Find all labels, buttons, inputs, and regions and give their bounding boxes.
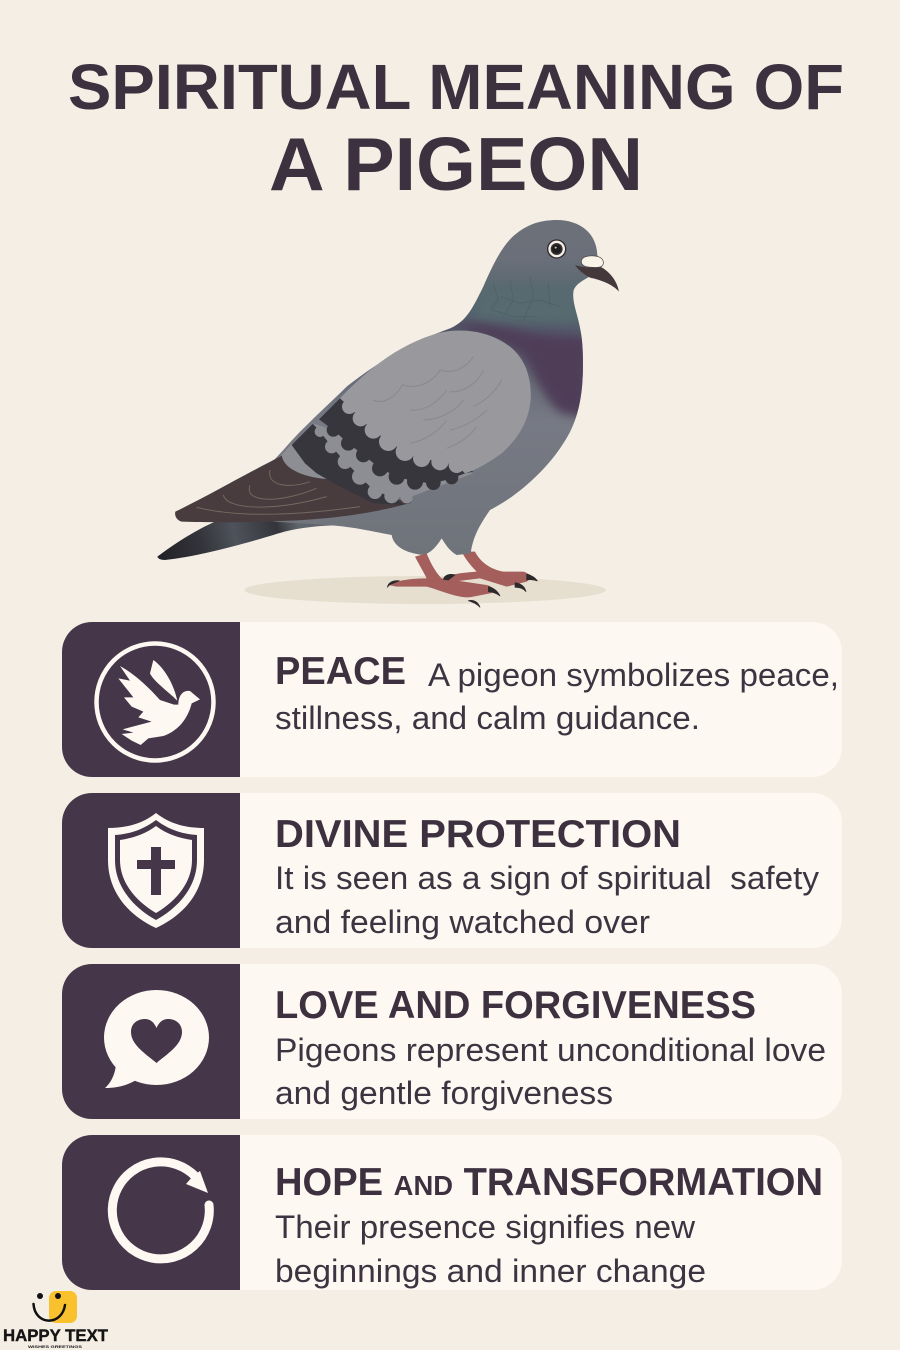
body text: A pigeon symbolizes peace, bbox=[428, 657, 839, 693]
front dark wing bar bbox=[319, 398, 473, 490]
icon: shield with cross bbox=[108, 813, 204, 928]
wing covert shield bbox=[340, 330, 531, 473]
body text: and gentle forgiveness bbox=[275, 1075, 613, 1111]
beak bbox=[575, 265, 619, 292]
body text: and feeling watched over bbox=[275, 904, 650, 940]
body text bbox=[275, 1209, 706, 1289]
panel: hope and transformation bbox=[62, 1135, 842, 1290]
title bbox=[68, 51, 844, 206]
eye bbox=[547, 239, 566, 259]
far leg bbox=[445, 552, 530, 587]
logo: happy text bbox=[3, 1291, 109, 1349]
heading: LOVE AND FORGIVENESS bbox=[275, 984, 756, 1027]
wing rear grey patch bbox=[282, 443, 332, 479]
body bbox=[273, 220, 602, 555]
tail bbox=[157, 518, 340, 560]
icon: circular arrow bbox=[112, 1162, 209, 1259]
title: A PIGEON bbox=[269, 122, 643, 206]
title: SPIRITUAL MEANING OF bbox=[68, 51, 844, 123]
body text: stillness, and calm guidance. bbox=[275, 700, 700, 736]
feather scallops bbox=[373, 357, 502, 448]
middle grey wing band bbox=[313, 423, 473, 503]
panel: peace bbox=[62, 622, 842, 777]
icon: dove in circle bbox=[96, 644, 214, 760]
body text bbox=[275, 860, 819, 940]
heading: PEACE bbox=[275, 650, 406, 693]
heading: DIVINE PROTECTION bbox=[275, 813, 681, 856]
body text: Their presence signifies new bbox=[275, 1209, 696, 1245]
body text: It is seen as a sign of spiritual safety bbox=[275, 860, 819, 896]
heading: HOPE AND TRANSFORMATION bbox=[275, 1161, 823, 1204]
logo: happy text: WISHES GREETINGS bbox=[28, 1344, 82, 1349]
pigeon illustration bbox=[157, 217, 619, 607]
panel: love and forgiveness bbox=[62, 964, 842, 1119]
rear dark wing bar bbox=[292, 424, 403, 505]
cere bbox=[581, 256, 603, 267]
body text bbox=[275, 1032, 826, 1111]
panel: divine protection bbox=[62, 793, 842, 948]
logo: happy text: HAPPY TEXT bbox=[3, 1326, 109, 1345]
primary wing feathers bbox=[175, 455, 412, 522]
near leg bbox=[388, 553, 494, 597]
ground shadow bbox=[244, 576, 606, 604]
body text: Pigeons represent unconditional love bbox=[275, 1032, 826, 1068]
claws bbox=[387, 574, 537, 607]
icon: speech bubble with heart bbox=[104, 990, 209, 1088]
body text bbox=[275, 657, 839, 736]
body text: beginnings and inner change bbox=[275, 1253, 706, 1289]
